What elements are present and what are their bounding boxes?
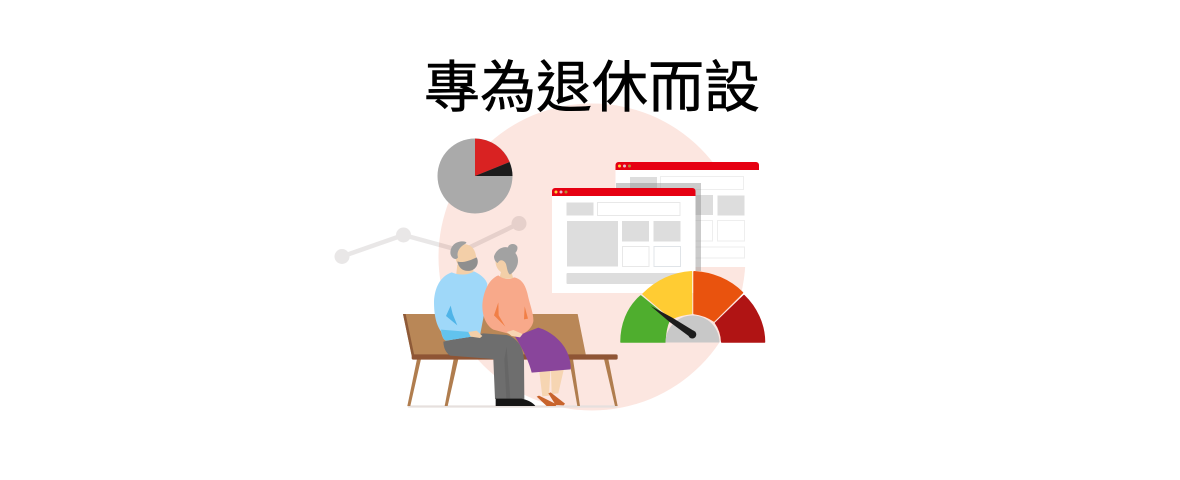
front browser window (552, 188, 696, 293)
gauge segment: orange (694, 272, 742, 321)
woman neck and face (495, 258, 513, 279)
gauge hub (666, 316, 720, 342)
gauge needle (651, 306, 694, 337)
background circle (438, 104, 746, 410)
bench and lower bodies (403, 314, 618, 408)
man neck (456, 265, 474, 276)
title: 專為退休而設 (424, 56, 760, 119)
woman shoes (537, 392, 565, 406)
line chart (334, 216, 526, 264)
back browser window (616, 162, 759, 267)
woman dress (515, 328, 571, 373)
clasped hands (507, 330, 523, 337)
man shoes (496, 399, 535, 406)
woman legs (539, 370, 564, 396)
man trousers (443, 333, 524, 399)
woman sweater (482, 275, 533, 335)
ground shadow (408, 405, 618, 408)
gauge segment: yellow (643, 272, 692, 318)
window shadow (616, 183, 701, 271)
gauge segment: red (716, 296, 764, 342)
man shirt (434, 271, 487, 341)
gauge (621, 272, 764, 342)
pie chart (438, 138, 512, 214)
bench seat (412, 354, 618, 360)
woman hair (494, 244, 518, 275)
gauge segment: green (621, 296, 670, 342)
upper bodies (434, 241, 533, 341)
man hand (468, 331, 482, 338)
bench back (403, 314, 586, 356)
man head (450, 241, 478, 271)
bench legs (407, 359, 618, 406)
